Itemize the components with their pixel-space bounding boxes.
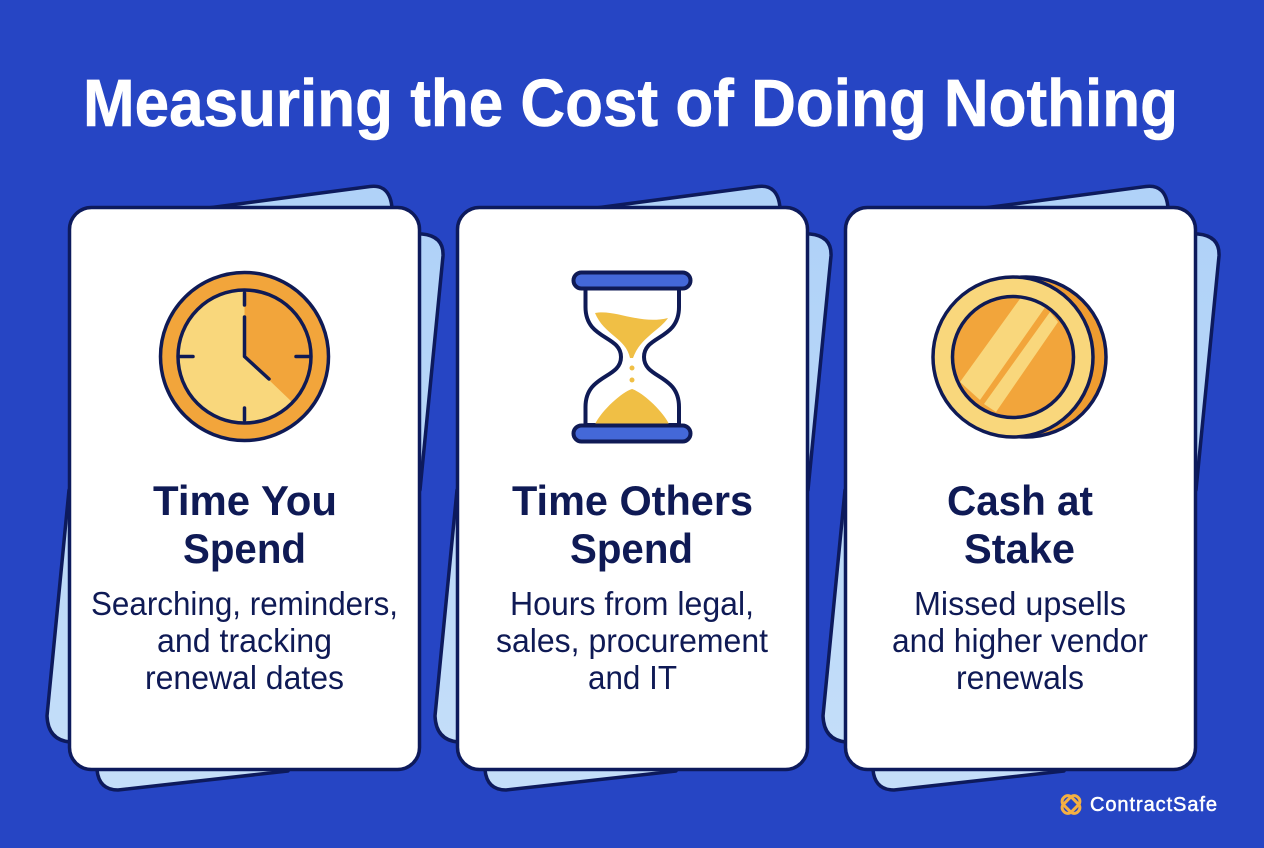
body text: Hours from legal, bbox=[510, 585, 754, 622]
body text: renewals bbox=[956, 659, 1084, 696]
stacked back cards bbox=[823, 186, 1219, 790]
heading: Time Others bbox=[512, 477, 753, 524]
white card bbox=[846, 208, 1196, 770]
icon: hourglass bbox=[574, 272, 690, 442]
title: Measuring the Cost of Doing Nothing bbox=[83, 66, 1178, 141]
heading: Spend bbox=[570, 525, 693, 572]
stacked back cards bbox=[47, 186, 443, 790]
panel: cash at stake bbox=[823, 186, 1219, 790]
heading bbox=[153, 477, 337, 572]
body text: sales, procurement bbox=[496, 622, 768, 659]
body text bbox=[91, 585, 398, 696]
logo: ContractSafe: ContractSafe bbox=[1090, 794, 1217, 816]
body text bbox=[496, 585, 768, 696]
body text: renewal dates bbox=[145, 659, 344, 696]
heading: Spend bbox=[183, 525, 306, 572]
body text: Searching, reminders, bbox=[91, 585, 398, 622]
heading: Cash at bbox=[947, 477, 1093, 524]
heading bbox=[947, 477, 1093, 572]
icon: coin bbox=[933, 277, 1106, 437]
white card bbox=[70, 208, 420, 770]
icon: logo mark bbox=[1060, 794, 1082, 815]
icon: clock bbox=[160, 272, 328, 440]
body text: and higher vendor bbox=[892, 622, 1148, 659]
body text: and tracking bbox=[157, 622, 332, 659]
heading: Stake bbox=[964, 525, 1075, 572]
stacked back cards bbox=[435, 186, 831, 790]
body text: and IT bbox=[588, 659, 677, 696]
white card bbox=[458, 208, 808, 770]
heading: Time You bbox=[153, 477, 337, 524]
panel: time others spend bbox=[435, 186, 831, 790]
body text: Missed upsells bbox=[914, 585, 1126, 622]
panel: time you spend bbox=[47, 186, 443, 790]
body text bbox=[892, 585, 1148, 696]
heading bbox=[512, 477, 753, 572]
